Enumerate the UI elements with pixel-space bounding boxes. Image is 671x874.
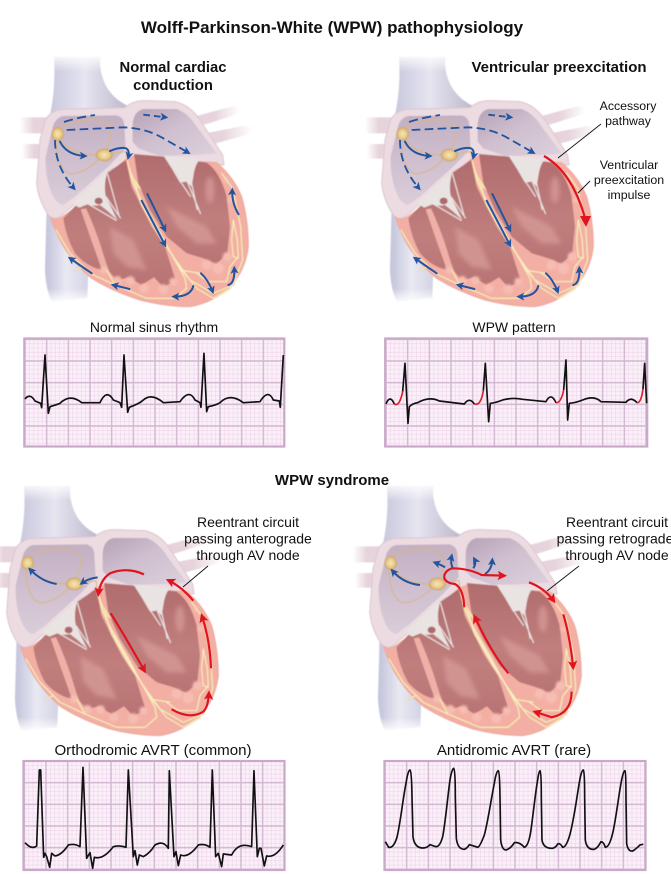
label: ventricular preexcitation impulse: impulse bbox=[608, 188, 650, 202]
arrows: antidromic reentrant circuit bbox=[392, 556, 573, 717]
caption: orthodromic AVRT: Orthodromic AVRT (common) bbox=[54, 742, 252, 759]
heart: normal cardiac conduction bbox=[20, 53, 253, 307]
label: reentrant circuit anterograde: Reentrant circuit bbox=[197, 514, 299, 530]
label: reentrant circuit retrograde: through AV node bbox=[565, 547, 669, 563]
caption: antidromic AVRT: Antidromic AVRT (rare) bbox=[437, 742, 591, 759]
conduction arrows: normal heart bbox=[55, 115, 239, 297]
arrow: ventricular preexcitation impulse bbox=[544, 156, 591, 227]
label: ventricular preexcitation impulse: preexcitation bbox=[594, 173, 664, 187]
heart: orthodromic AVRT bbox=[0, 482, 223, 736]
ECG panel: WPW pattern bbox=[385, 338, 647, 446]
label: reentrant circuit retrograde bbox=[547, 514, 671, 591]
label: accessory pathway: Accessory bbox=[600, 99, 657, 113]
ECG panel: orthodromic AVRT bbox=[24, 761, 284, 870]
label: reentrant circuit anterograde: passing anterograde bbox=[184, 530, 312, 546]
heart: ventricular preexcitation bbox=[365, 53, 598, 307]
caption: WPW pattern: WPW pattern bbox=[472, 319, 556, 335]
label: ventricular preexcitation impulse bbox=[578, 158, 664, 202]
heading: normal cardiac conduction: conduction bbox=[133, 78, 213, 94]
label: reentrant circuit retrograde: passing retrograde bbox=[557, 530, 671, 546]
label: reentrant circuit anterograde: through AV node bbox=[196, 547, 300, 563]
arrows: orthodromic reentrant circuit bbox=[30, 569, 211, 715]
label: accessory pathway: pathway bbox=[605, 114, 652, 128]
conduction arrows: preexcitation heart bbox=[400, 115, 579, 297]
label: ventricular preexcitation impulse: Ventricular bbox=[600, 158, 658, 172]
label: reentrant circuit anterograde bbox=[183, 514, 312, 587]
label: accessory pathway bbox=[558, 99, 657, 158]
title: Wolff-Parkinson-White (WPW) pathophysiology bbox=[141, 18, 524, 37]
heading: WPW syndrome: WPW syndrome bbox=[275, 472, 389, 489]
heading: ventricular preexcitation: Ventricular preexcitation bbox=[471, 59, 647, 76]
ECG panel: normal sinus rhythm bbox=[24, 338, 284, 446]
heading: normal cardiac conduction: Normal cardiac bbox=[120, 60, 226, 76]
caption: normal sinus rhythm: Normal sinus rhythm bbox=[90, 319, 218, 335]
heart: antidromic AVRT bbox=[353, 482, 586, 736]
ECG panel: antidromic AVRT bbox=[384, 761, 646, 870]
label: reentrant circuit retrograde: Reentrant circuit bbox=[566, 514, 668, 530]
